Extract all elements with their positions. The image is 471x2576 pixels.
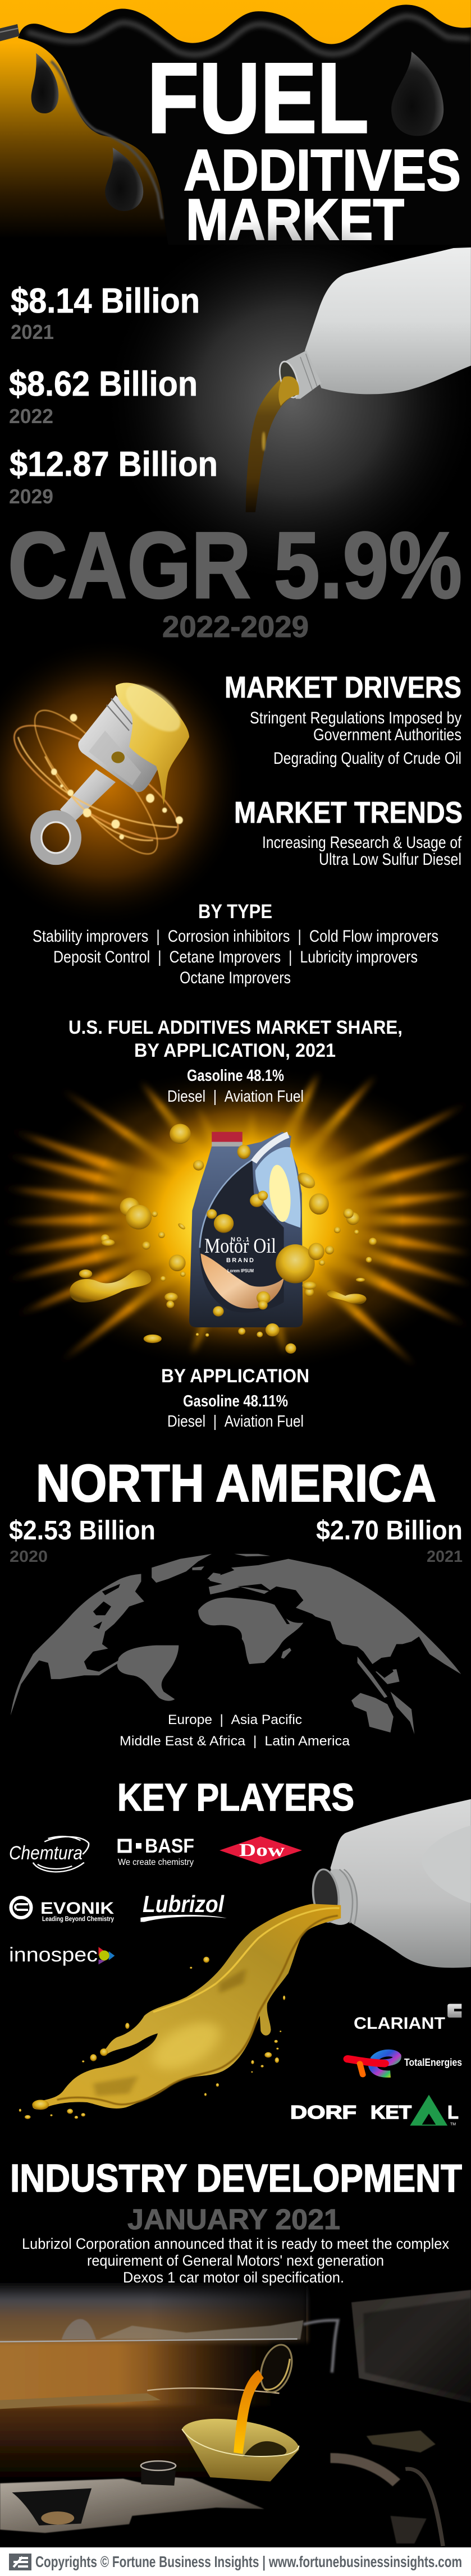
heading: U.S. market share: U.S. FUEL ADDITIVES MARKET SHARE,: [68, 1017, 403, 1038]
panel: U.S. market share by application: [0, 1017, 471, 1374]
panel: industry development: [0, 2156, 471, 2546]
logo: TotalEnergies: [348, 2053, 462, 2075]
logo: Lubrizol: Lubrizol: [143, 1891, 225, 1917]
bottle label text: Lorem IPSUM: [227, 1268, 254, 1273]
bottle label text: NO.1: [231, 1236, 249, 1243]
golden light burst: [0, 1065, 471, 1374]
bottle label text: BRAND: [226, 1257, 254, 1264]
icon: Fortune Business Insights logo: [9, 2554, 31, 2570]
icon: piston with oil: [0, 637, 246, 927]
logo: Dow: Dow: [239, 1840, 285, 1860]
application: others: Diesel | Aviation Fuel: [167, 1413, 304, 1431]
icon: motor oil bottle: [189, 1132, 303, 1327]
world map globe: [11, 1554, 461, 1734]
logo: Dow: [220, 1836, 302, 1864]
heading: key players: KEY PLAYERS: [117, 1776, 354, 1819]
CAGR period: 2022-2029: [162, 610, 309, 644]
application: gasoline: Gasoline 48.11%: [183, 1392, 288, 1410]
value: 2021: $2.70 Billion: [316, 1516, 463, 1546]
development description: Lubrizol Corporation announced that it is ready to meet the complex: [22, 2235, 449, 2252]
footer: copyright bar: [0, 2547, 471, 2576]
development description: requirement of General Motors' next generation: [87, 2252, 384, 2269]
stat: 2029 value: $12.87 Billion: [10, 445, 218, 484]
heading: by type: BY TYPE: [198, 901, 272, 923]
stat: 2021 value: $8.14 Billion: [11, 282, 200, 320]
logo: Dorf Ketal: KET: [371, 2102, 411, 2123]
logo: TotalEnergies: TotalEnergies: [404, 2057, 462, 2068]
heading: U.S. market share: [68, 1017, 403, 1061]
market trends list: [262, 833, 462, 869]
logo: Clariant: [354, 2004, 461, 2033]
logo: Dorf Ketal: L: [447, 2102, 459, 2123]
logo: Dorf Ketal: DORF: [290, 2102, 356, 2123]
share: other applications: Diesel | Aviation Fuel: [167, 1088, 304, 1106]
logo: Chemtura: Chemtura: [9, 1842, 83, 1864]
other regions list: Middle East & Africa | Latin America: [120, 1734, 350, 1749]
logo: Clariant: CLARIANT: [354, 2014, 445, 2033]
logo: BASF: BASF: [145, 1835, 194, 1857]
heading: by application: BY APPLICATION: [161, 1365, 309, 1387]
year: 2021: 2021: [427, 1548, 463, 1566]
type list: [33, 927, 438, 987]
jug background glow: [101, 216, 471, 586]
value: 2020: $2.53 Billion: [9, 1516, 156, 1546]
year: 2020: 2020: [10, 1548, 48, 1566]
icon: jug pouring golden oil: [19, 1799, 471, 2119]
stat: 2029 label: 2029: [9, 485, 53, 508]
logo: Evonik: Leading Beyond Chemistry: [42, 1915, 114, 1923]
logo: Dorf Ketal: TM: [450, 2123, 456, 2126]
type list: Octane Improvers: [180, 969, 291, 987]
bottle label text: [204, 1235, 276, 1273]
panel: CAGR: [8, 512, 462, 644]
other regions list: Europe | Asia Pacific: [168, 1712, 302, 1727]
logo: BASF: We create chemistry: [118, 1858, 194, 1867]
icon: pouring jug: [246, 247, 471, 512]
panel: key players: [9, 1776, 471, 2126]
date: JANUARY 2021: [127, 2203, 340, 2235]
panel: market size figures and pouring jug: [9, 216, 471, 586]
oil drip artwork: [0, 0, 471, 245]
stat: 2022 label: 2022: [9, 405, 53, 428]
panel: by application: [161, 1365, 309, 1431]
title: FUEL: FUEL: [147, 42, 369, 154]
stat: 2021 label: 2021: [11, 320, 54, 343]
oil droplets: [70, 1124, 377, 1354]
logo: Innospec: innospec: [9, 1943, 98, 1966]
heading: U.S. market share: BY APPLICATION, 2021: [134, 1040, 336, 1061]
panel: regional: [9, 1454, 463, 1749]
logo: BASF: [118, 1835, 194, 1867]
logo: Dorf Ketal: [290, 2095, 459, 2126]
other regions list: [120, 1712, 350, 1749]
development description: [22, 2235, 449, 2286]
share: gasoline: Gasoline 48.1%: [187, 1067, 284, 1085]
logo: Evonik: [11, 1897, 114, 1923]
stat: 2022 value: $8.62 Billion: [9, 365, 198, 404]
photo: oil pouring into engine: [0, 2276, 471, 2546]
market drivers list: [250, 709, 461, 768]
panel: header with oil drip and title: [0, 0, 471, 253]
bottle label text: Motor Oil: [204, 1235, 276, 1258]
logo: Chemtura: [9, 1836, 89, 1872]
title: MARKET: MARKET: [186, 187, 404, 253]
panel: by type: [33, 901, 438, 987]
development description: Dexos 1 car motor oil specification.: [123, 2269, 344, 2286]
panel: piston with drivers and trends: [0, 637, 463, 927]
heading: North America: NORTH AMERICA: [36, 1454, 436, 1512]
logo: Evonik: EVONIK: [40, 1899, 114, 1918]
